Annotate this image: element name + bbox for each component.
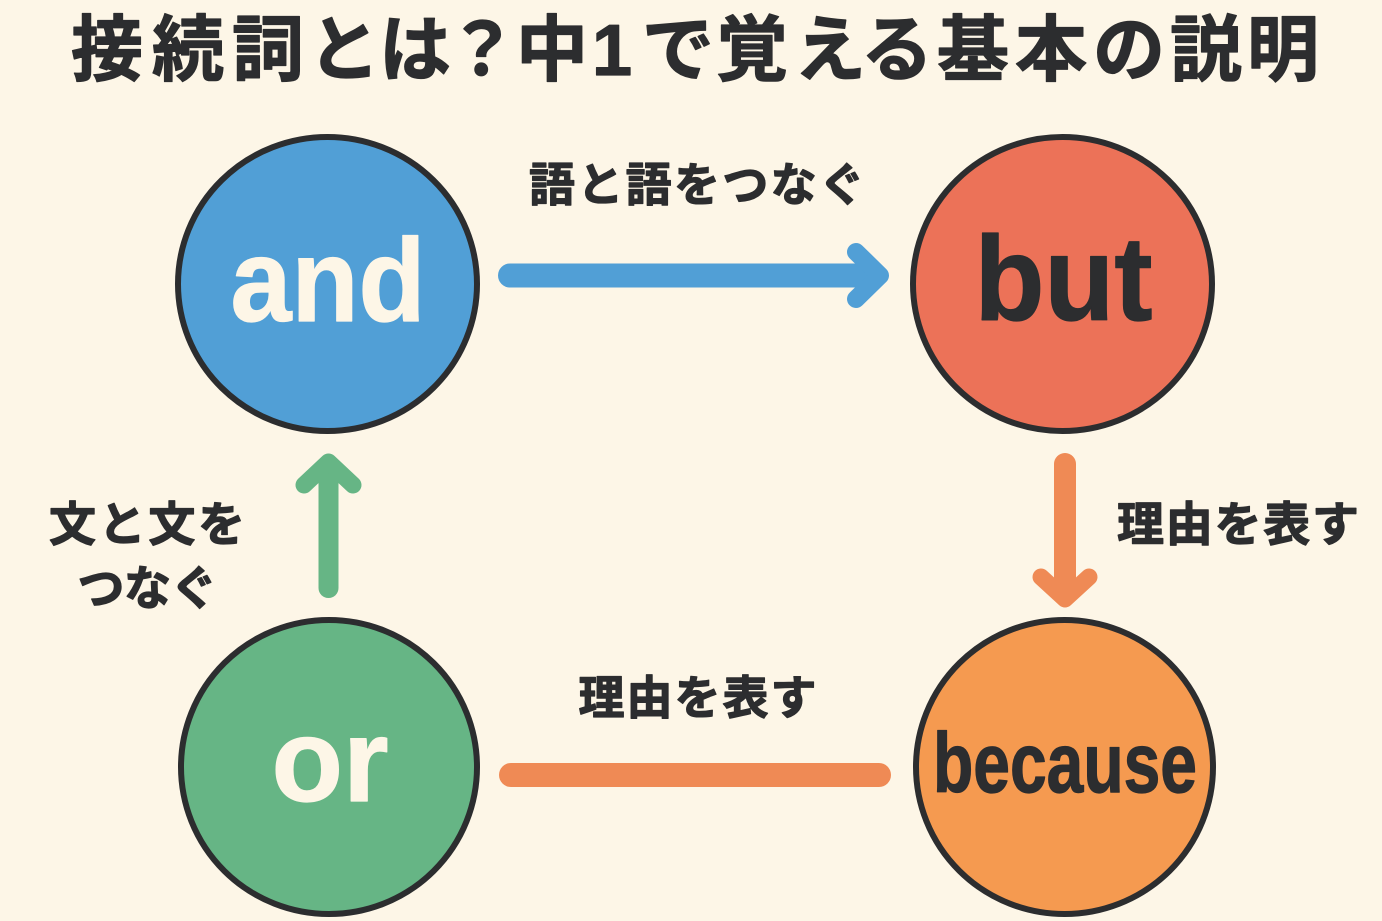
label: connects sentences: つなぐ [78,562,218,615]
node: or: or [272,695,388,827]
node: and: and [230,215,426,347]
line: because to or [511,763,879,787]
arrow: but to because [1041,464,1089,599]
label: shows reason bottom: 理由を表す [578,672,816,724]
label: connects sentences [49,498,245,615]
label: connects sentences: 文と文を [49,498,245,551]
title: 接続詞とは？中1で覚える基本の説明 [71,11,1319,91]
label: shows reason right: 理由を表す [1117,498,1359,551]
node: but [913,137,1212,431]
arrow: and to but [510,252,880,299]
label: connects words: 語と語をつなぐ [529,159,865,211]
node: or [181,620,477,914]
node: because: because [933,716,1197,810]
node: and [178,137,477,431]
node: but: but [974,212,1152,346]
arrow: or to and [304,462,353,588]
node: because [916,620,1213,914]
